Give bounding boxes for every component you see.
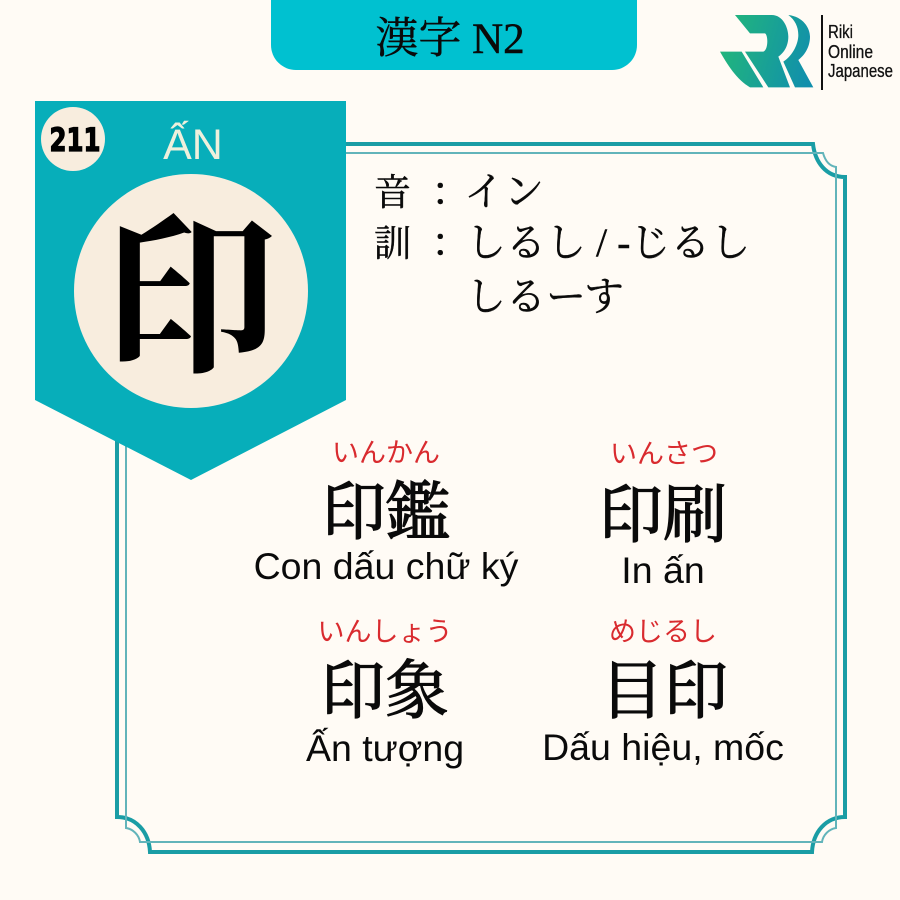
- vocabulary: mejirushi: [542, 610, 784, 768]
- badge: number 211: [41, 107, 105, 171]
- readings: on and kun: イン: [464, 169, 544, 214]
- header tab: [271, 0, 637, 70]
- vocabulary: inshou: 印象: [321, 640, 449, 732]
- vocabulary: insatsu: 印刷: [599, 464, 727, 556]
- logo: Riki Online Japanese: Riki: [828, 22, 853, 42]
- vocabulary: mejirushi: 目印: [600, 640, 728, 732]
- vocabulary: inshou: [306, 610, 464, 769]
- readings: on and kun: [374, 169, 750, 319]
- vocabulary: inshou: Ấn tượng: [306, 727, 464, 769]
- vocabulary: insatsu: いんさつ: [610, 432, 718, 471]
- vocabulary: inkan: Con dấu chữ ký: [254, 545, 519, 587]
- heading: Kanji N2: 漢字 N2: [375, 16, 525, 63]
- reading: Sino-Vietnamese: ẤN: [163, 121, 223, 169]
- logo: Riki Online Japanese: [720, 15, 893, 90]
- readings: on and kun: 訓: [374, 224, 411, 265]
- readings: on and kun: ：: [431, 220, 471, 265]
- main kanji circle: 印: [104, 158, 278, 408]
- vocabulary: mejirushi: Dấu hiệu, mốc: [542, 726, 784, 768]
- vocabulary: mejirushi: めじるし: [609, 610, 717, 649]
- readings: on and kun: 音: [374, 173, 411, 214]
- logo: Riki Online Japanese: Online: [828, 42, 873, 62]
- vocabulary: insatsu: [599, 432, 727, 591]
- vocabulary: inshou: いんしょう: [318, 610, 452, 649]
- panel: decorative double frame: [117, 144, 845, 852]
- readings: on and kun: しるし / -じるし: [466, 220, 750, 265]
- badge: number 211: 211: [50, 121, 100, 159]
- readings: on and kun: ：: [431, 169, 471, 214]
- vocabulary: inkan: いんかん: [332, 431, 440, 470]
- readings: on and kun: しるーす: [466, 274, 624, 319]
- vocabulary: inkan: 印鑑: [322, 461, 450, 553]
- panel: kanji banner: [35, 101, 346, 480]
- vocabulary: insatsu: In ấn: [621, 549, 705, 591]
- vocabulary: inkan: [254, 431, 519, 587]
